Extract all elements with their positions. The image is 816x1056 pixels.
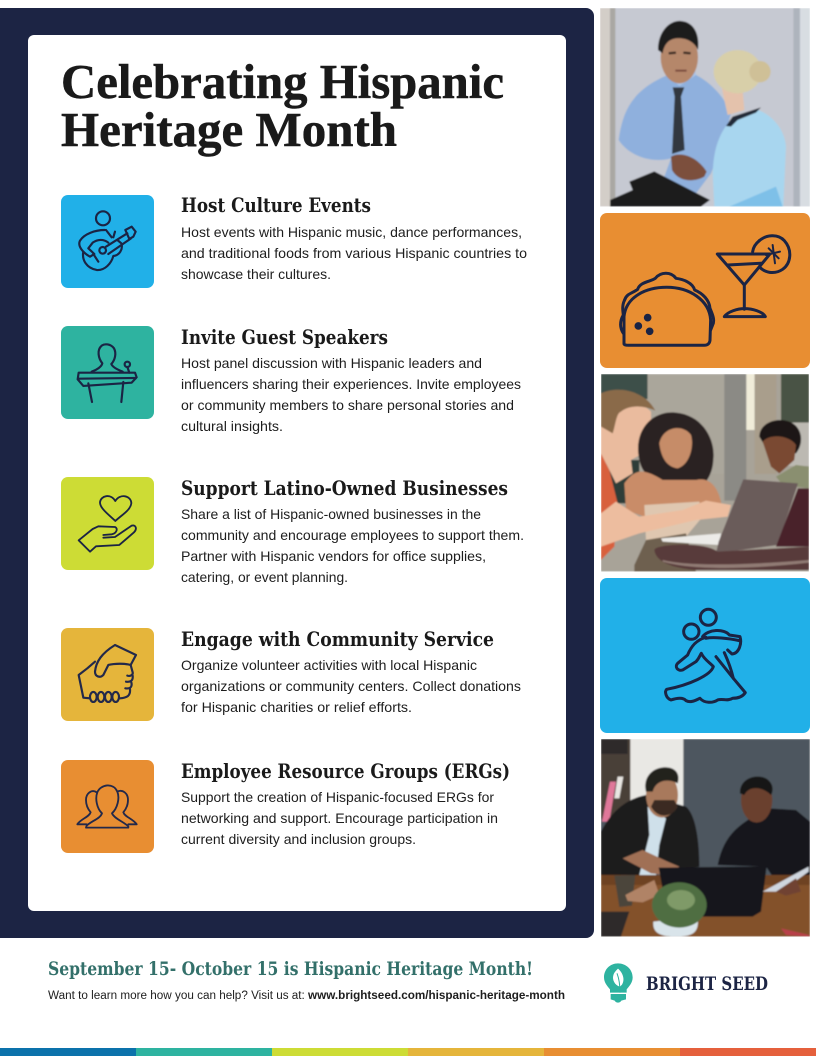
item: Engage with Community Service xyxy=(61,628,521,721)
title: Heritage Month xyxy=(61,102,397,157)
photo: two colleagues shaking hands xyxy=(600,8,810,207)
heading: Support Latino-Owned Businesses xyxy=(181,477,508,500)
description: networking and support. Encourage participation in xyxy=(181,810,498,826)
description: cultural insights. xyxy=(181,418,283,434)
item: Host Culture Events xyxy=(61,194,527,288)
description: Host panel discussion with Hispanic leaders and xyxy=(181,355,482,371)
heading: Engage with Community Service xyxy=(181,628,494,651)
footer text with link: Want to learn more how you can help? Visit us at: www.brightseed.com/hispanic-heritage-month xyxy=(48,990,565,1002)
description xyxy=(181,355,521,434)
icon: taco xyxy=(621,273,714,345)
description: current diversity and inclusion groups. xyxy=(181,831,416,847)
footer heading: September 15- October 15 is Hispanic Heritage Month! xyxy=(48,959,533,980)
description xyxy=(181,657,521,715)
title xyxy=(61,54,504,157)
icon: light bulb with leaf xyxy=(604,963,633,1003)
photo: two men at a laptop xyxy=(601,739,810,937)
colour stripe xyxy=(0,1048,816,1056)
icon: cocktail xyxy=(717,236,790,317)
icon: group of people xyxy=(61,760,154,853)
item: Employee Resource Groups (ERGs) xyxy=(61,760,510,853)
description: for Hispanic charities or relief efforts. xyxy=(181,699,412,715)
icon: handshake xyxy=(61,628,154,721)
item: Invite Guest Speakers xyxy=(61,326,521,434)
photo: three people at a laptop xyxy=(601,374,809,572)
description: or community members to share personal stories and xyxy=(181,397,514,413)
heading: Employee Resource Groups (ERGs) xyxy=(181,760,510,783)
navy background panel xyxy=(0,8,594,938)
description: Host events with Hispanic music, dance performances, xyxy=(181,224,522,240)
heading: Host Culture Events xyxy=(181,194,371,217)
description: Support the creation of Hispanic-focused ERGs for xyxy=(181,789,494,805)
icon: dancing couple xyxy=(666,609,745,702)
icon: speaker at podium xyxy=(61,326,154,419)
logo wordmark: BRIGHT SEED xyxy=(646,974,768,995)
description xyxy=(181,224,527,282)
item: Support Latino-Owned Businesses xyxy=(61,477,524,585)
description xyxy=(181,789,498,847)
description: community and encourage employees to support them. xyxy=(181,527,524,543)
description: influencers sharing their experiences. Invite employees xyxy=(181,376,521,392)
heading: Invite Guest Speakers xyxy=(181,326,388,349)
description xyxy=(181,506,524,585)
footer callout xyxy=(48,959,565,1002)
panel: taco and cocktail xyxy=(600,213,810,368)
icon: hand holding heart xyxy=(61,477,154,570)
description: Share a list of Hispanic-owned businesses in the xyxy=(181,506,481,522)
title: Celebrating Hispanic xyxy=(61,54,504,109)
description: and traditional foods from various Hispanic countries to xyxy=(181,245,527,261)
description: catering, or event planning. xyxy=(181,569,348,585)
description: organizations or community centers. Collect donations xyxy=(181,678,521,694)
description: Partner with Hispanic vendors for office supplies, xyxy=(181,548,486,564)
logo: Bright Seed xyxy=(604,963,768,1003)
panel: dancing couple xyxy=(600,578,810,733)
icon: guitarist xyxy=(61,195,154,288)
description: Organize volunteer activities with local Hispanic xyxy=(181,657,477,673)
description: showcase their cultures. xyxy=(181,266,331,282)
white content panel xyxy=(28,35,566,911)
